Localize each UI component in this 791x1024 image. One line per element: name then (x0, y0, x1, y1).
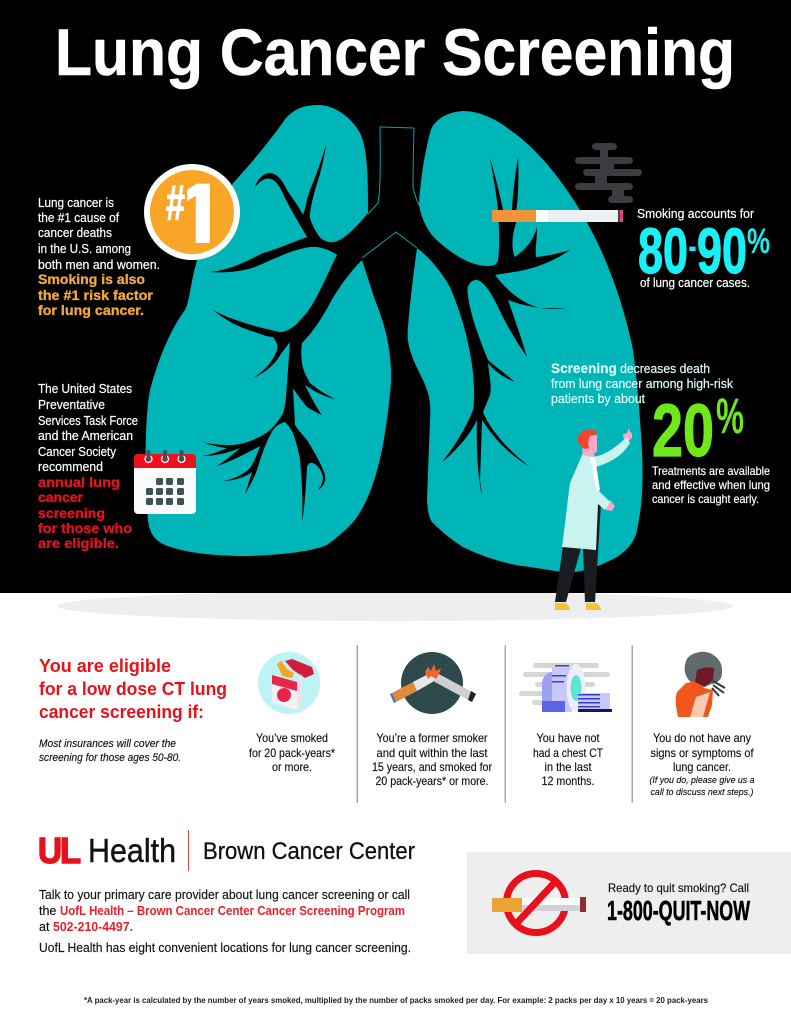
text: number one cause: in the U.S. among (38, 242, 131, 256)
text: USPSTF recommendation: recommend (38, 460, 103, 474)
left bronchi (202, 145, 400, 522)
text: insurance note: screening for those ages 50-80. (39, 752, 181, 764)
stat: screening 20%: from lung cancer among high-risk (551, 377, 734, 391)
stat: screening 20%: and effective when lung (652, 478, 770, 492)
text: USPSTF recommendation: for those who (38, 521, 132, 536)
stat: screening 20%: % (716, 388, 744, 444)
stat: screening 20%: Treatments are available (652, 464, 770, 478)
badge: number one: # (166, 175, 185, 231)
text: contact information: Talk to your primary care provider about lung cancer screening or call (39, 888, 410, 902)
floor shadow (57, 591, 733, 621)
text: smoked 20 pack-years: or more. (272, 760, 312, 774)
stat: screening 20%: Screening decreases death (551, 360, 710, 376)
stat: smoking 80-90%: - (689, 231, 696, 262)
stat: smoking 80-90%: % (747, 222, 770, 261)
illustration: doctor (555, 428, 632, 610)
stat: smoking 80-90%: Smoking accounts for (637, 207, 754, 221)
text: contact information: at (39, 920, 50, 934)
logo: UofL Health Brown Cancer Center: U (38, 830, 62, 871)
stat: smoking 80-90% (637, 207, 770, 290)
text: contact information: 502-210-4497. (53, 920, 133, 934)
text: no chest CT: in the last (544, 760, 592, 774)
logo: UofL Health Brown Cancer Center (38, 830, 415, 871)
text: no symptoms: lung cancer. (673, 760, 731, 774)
trachea outline (362, 127, 419, 258)
text: no symptoms: signs or symptoms of (650, 746, 754, 760)
text: number one cause: both men and women. (38, 258, 160, 272)
text: smoked 20 pack-years: You’ve smoked (256, 731, 328, 745)
text: former smoker: You’re a former smoker (376, 731, 488, 745)
text: contact information (39, 888, 411, 955)
logo: UofL Health Brown Cancer Center: Health (88, 832, 176, 869)
text: former smoker: 20 pack-years* or more. (376, 774, 488, 788)
black hero background (0, 0, 791, 593)
title: Lung Cancer Screening (55, 15, 735, 89)
heading: eligibility: for a low dose CT lung (39, 678, 227, 699)
stat: smoking 80-90%: 90 (697, 215, 747, 287)
heading: eligibility: You are eligible (39, 655, 171, 676)
text: no symptoms: (If you do, please give us a (650, 775, 754, 786)
text: no chest CT: You have not (536, 731, 600, 745)
stat: screening 20%: patients by about (551, 392, 646, 406)
icon: calendar (134, 450, 196, 514)
text: insurance note (39, 738, 181, 764)
text: no chest CT: had a chest CT (533, 746, 604, 760)
text: USPSTF recommendation: are eligible. (38, 536, 119, 551)
stat: screening 20% (551, 360, 770, 506)
text: former smoker (372, 731, 492, 788)
icon: coughing person (676, 652, 725, 717)
text: number one cause: Lung cancer is (38, 196, 114, 210)
lungs illustration (146, 105, 643, 572)
text: USPSTF recommendation: Services Task Force (38, 414, 138, 428)
panel: quit smoking (467, 852, 791, 954)
panel: quit smoking: Ready to quit smoking? Call (608, 881, 749, 895)
icon: cigarette pack (258, 652, 320, 714)
text: no chest CT (533, 731, 604, 788)
icon: smoke (575, 143, 642, 203)
stat: screening 20%: 20 (652, 389, 714, 472)
text: no symptoms: You do not have any (653, 731, 751, 745)
stat: smoking 80-90%: 80 (638, 215, 688, 287)
text: number one cause: the #1 cause of (38, 211, 119, 225)
text: number one cause (38, 196, 160, 318)
heading: eligibility (39, 655, 227, 722)
text: USPSTF recommendation: screening (38, 506, 105, 521)
text: USPSTF recommendation: The United States (38, 382, 132, 396)
right bronchi (385, 157, 570, 495)
icon: broken cigarette (390, 652, 476, 714)
right lung (408, 111, 643, 572)
logo: UofL Health Brown Cancer Center: L (60, 830, 81, 871)
text: number one cause: for lung cancer. (38, 302, 144, 318)
text: number one cause: cancer deaths (38, 226, 112, 240)
text: insurance note: Most insurances will cover the (39, 738, 176, 750)
logo: UofL Health Brown Cancer Center: Brown Cancer Center (203, 838, 415, 865)
text: USPSTF recommendation: Preventative (38, 398, 105, 412)
text: USPSTF recommendation: cancer (38, 490, 84, 505)
text: smoked 20 pack-years (249, 731, 335, 774)
left lung (146, 105, 391, 556)
stat: screening 20%: cancer is caught early. (652, 492, 759, 506)
text: number one cause: the #1 risk factor (38, 287, 154, 303)
icon: CT scanner (519, 663, 612, 712)
text: former smoker: 15 years, and smoked for (372, 760, 492, 774)
text: number one cause: Smoking is also (38, 271, 145, 287)
text: contact information: UofL Health has eight convenient locations for lung cancer screening. (39, 941, 411, 955)
icon: no smoking (492, 874, 586, 932)
text: smoked 20 pack-years: for 20 pack-years* (249, 746, 335, 760)
text: USPSTF recommendation: Cancer Society (38, 445, 117, 459)
text: former smoker: and quit within the last (376, 746, 488, 760)
text: no chest CT: 12 months. (542, 774, 594, 788)
heading: eligibility: cancer screening if: (39, 701, 204, 722)
badge: number one: 1 (172, 162, 229, 276)
footnote: *A pack-year is calculated by the number of years smoked, multiplied by the number of packs smoked per day. For example: 2 packs per day x 10 years = 20 pack-years (84, 995, 708, 1005)
text: USPSTF recommendation: annual lung (38, 475, 120, 490)
badge: number one (144, 164, 240, 260)
text: USPSTF recommendation (38, 382, 138, 551)
icon: cigarette (492, 210, 623, 222)
text: no symptoms (650, 731, 754, 798)
text: no symptoms: call to discuss next steps.) (650, 787, 754, 798)
text: contact information: the (39, 904, 56, 918)
text: USPSTF recommendation: and the American (38, 429, 133, 443)
text: contact information: UofL Health – Brown Cancer Center Cancer Screening Program (60, 904, 405, 918)
stat: smoking 80-90%: of lung cancer cases. (640, 276, 750, 290)
